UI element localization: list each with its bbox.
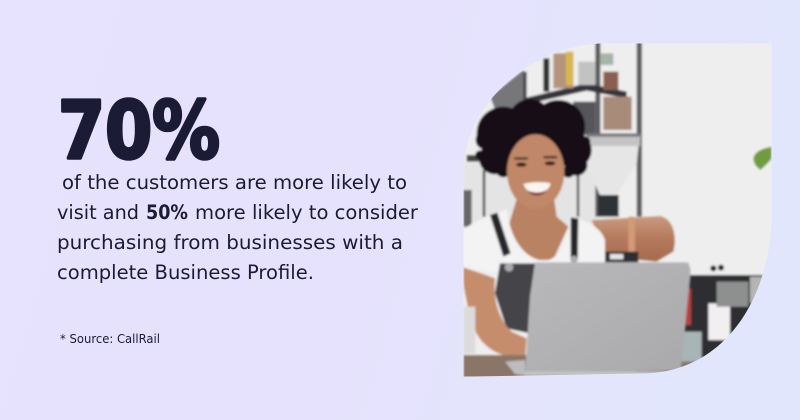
table: [463, 355, 697, 378]
copper grinder body: [592, 216, 675, 262]
body text block: [57, 171, 419, 284]
laptop: [505, 262, 691, 376]
smile: [523, 182, 551, 193]
body text block: of the customers are more likely to: [62, 171, 407, 194]
apron: [495, 263, 535, 333]
grinder hopper: [587, 138, 639, 195]
neck: [508, 193, 568, 260]
face: [507, 134, 564, 209]
body text block: purchasing from businesses with a: [57, 231, 403, 254]
hair: [475, 99, 592, 178]
body text block: visit and: [57, 201, 139, 224]
right counter equipment: [682, 265, 763, 362]
bold stat: 50%: 50%: [146, 201, 188, 224]
body text block: more likely to consider: [195, 201, 419, 224]
shelf unit: [463, 40, 642, 227]
counter items, left: [463, 307, 475, 353]
infographic canvas: [58, 43, 772, 376]
arm: [463, 267, 527, 358]
wall: [460, 40, 777, 380]
eyes and brows: [514, 156, 557, 167]
headline stat: 70%: 70%: [58, 85, 220, 177]
source note: * Source: CallRail: [60, 332, 160, 346]
leaf: [753, 147, 772, 170]
body text block: complete Business Profile.: [57, 261, 314, 284]
apron straps: [490, 213, 511, 257]
photo: smiling woman at laptop in a cafe: [460, 40, 777, 380]
shirt: [466, 210, 607, 262]
